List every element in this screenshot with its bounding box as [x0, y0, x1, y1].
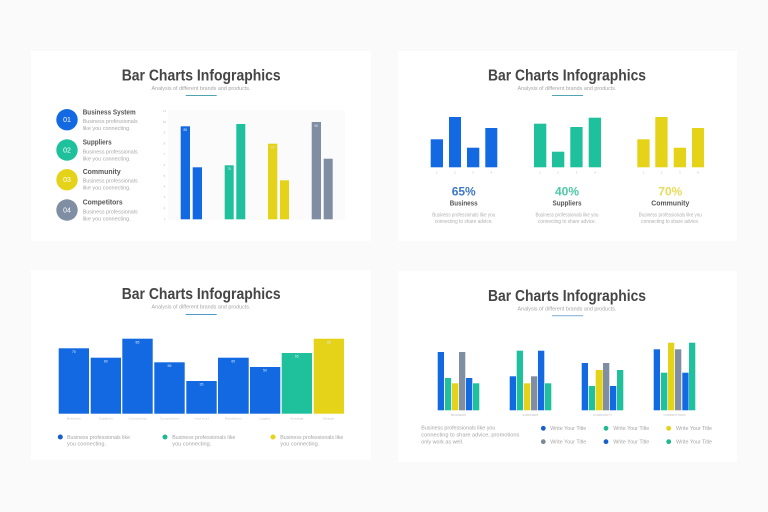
item: Community: Community — [83, 169, 121, 176]
legend: yellow — [270, 434, 343, 447]
bar chart: 85 — [136, 340, 139, 344]
legend grid: Write Your Title — [676, 440, 712, 446]
item: Competitors: Business professionals — [83, 209, 138, 215]
chart: Community: 2 — [661, 170, 663, 174]
legend grid — [541, 426, 712, 446]
legend grid: Write Your Title — [613, 426, 649, 432]
bar chart: Internal — [194, 416, 209, 420]
subtitle: Analysis of different brands and products. — [518, 306, 617, 312]
bar chart: 60 — [231, 359, 235, 363]
bar chart: Competitors — [160, 416, 180, 420]
stat: Suppliers — [536, 184, 599, 225]
item: Competitors: 04 — [63, 208, 71, 214]
bar group: Suppliers: SUPPLIERS — [522, 413, 538, 417]
chart: Community: 1 — [643, 170, 645, 174]
title underline — [186, 94, 217, 97]
item: Suppliers — [56, 139, 138, 162]
item: Competitors: like you connecting. — [83, 216, 131, 222]
panel: wide nine-column bar chart — [31, 270, 371, 460]
stat: Business — [432, 184, 495, 225]
title: Bar Charts Infographics — [122, 68, 281, 85]
bar chart: Logistic — [260, 416, 271, 420]
chart: Business: 3 — [472, 170, 474, 174]
chart: Business: 1 — [436, 170, 438, 174]
stat: Suppliers: Suppliers — [552, 201, 582, 208]
stat: Business: connecting to share advice. — [435, 219, 493, 225]
chart: Business: 2 — [454, 170, 456, 174]
legend grid: Write Your Title — [550, 426, 586, 432]
stat: Community: Community — [651, 201, 689, 208]
grouped bar chart: 85 — [183, 128, 187, 132]
bar chart: 85 — [327, 340, 331, 344]
grouped bar chart: 5 — [164, 174, 166, 178]
bar chart: 55 — [168, 364, 171, 368]
bar chart: 50 — [263, 369, 267, 373]
title: Bar Charts Infographics — [488, 288, 646, 305]
grouped bar chart: 10 — [163, 120, 166, 124]
grouped bar chart: 3 — [164, 195, 166, 199]
title: Bar Charts Infographics — [122, 286, 281, 303]
legend: yellow: you connecting. — [280, 441, 320, 447]
bar chart: 35 — [200, 383, 203, 387]
legend grid: Write Your Title — [613, 440, 649, 446]
bar chart: Community — [128, 416, 147, 420]
legend: green: you connecting. — [172, 441, 212, 447]
item: Business System: Business System — [83, 109, 136, 116]
grouped bar chart: 9 — [164, 130, 166, 134]
bar chart: 60 — [104, 359, 108, 363]
subtitle: Analysis of different brands and products. — [152, 304, 251, 310]
grouped bar chart: 1 — [164, 217, 166, 221]
legend: green — [162, 434, 235, 447]
bar group: Business: BUSINESS — [451, 413, 466, 417]
panel: four multi-bar groups — [398, 271, 737, 462]
item: Suppliers: 02 — [63, 148, 71, 154]
legend: blue — [58, 434, 130, 447]
stat: Community — [639, 184, 702, 225]
bar group: Competitors: COMPETITORS — [664, 413, 686, 417]
title: Bar Charts Infographics — [488, 68, 646, 85]
stat: Business: Business professionals like you — [432, 212, 495, 218]
stat: Suppliers: 40% — [555, 184, 579, 198]
grouped bar chart: 4 — [164, 184, 166, 188]
title underline — [552, 94, 583, 97]
bar chart: Design — [323, 416, 335, 420]
chart: Business — [431, 117, 497, 174]
item: Business System: like you connecting. — [83, 126, 131, 132]
grouped bar chart: 90 — [314, 124, 318, 128]
stat: Suppliers: connecting to share advice. — [538, 219, 596, 225]
grouped bar chart: 2 — [164, 206, 166, 210]
chart: Suppliers — [534, 118, 601, 174]
grouped bar chart: 75 — [227, 167, 231, 171]
stat: Suppliers: Business professionals like you — [536, 212, 599, 218]
grouped bar chart — [163, 109, 345, 221]
grouped bar chart: 70 — [271, 146, 275, 150]
chart: Community: 4 — [697, 170, 699, 174]
legend grid: Write Your Title — [676, 426, 712, 432]
bar chart: 65 — [295, 355, 299, 359]
bar group: Suppliers — [510, 351, 551, 417]
item: Competitors: Competitors — [83, 200, 123, 207]
bar group: Community: COMMUNITY — [593, 413, 612, 417]
item: Suppliers: like you connecting. — [83, 156, 131, 162]
chart: Business: 4 — [490, 170, 492, 174]
stat: Business: 65% — [452, 184, 476, 198]
item: Suppliers: Business professionals — [83, 149, 138, 155]
chart: Suppliers: 3 — [576, 170, 578, 174]
chart: Community — [637, 117, 704, 174]
legend: yellow: Business professionals like — [280, 435, 343, 441]
description text: only work as well. — [421, 440, 464, 446]
bar group: Community — [582, 363, 623, 417]
item: Community — [56, 169, 138, 192]
item: Community: 03 — [63, 177, 71, 184]
panel: legend list and grouped bars — [31, 51, 371, 241]
item: Business System: 01 — [63, 117, 71, 124]
grouped bar chart: 8 — [164, 142, 166, 146]
grouped bar chart: 11 — [163, 109, 166, 113]
chart: Suppliers: 4 — [594, 170, 596, 174]
bar chart: 75 — [72, 350, 76, 354]
title underline — [552, 314, 583, 317]
item: Community: Business professionals — [83, 179, 138, 185]
subtitle: Analysis of different brands and products. — [152, 86, 251, 92]
description text: Business professionals like you — [421, 426, 495, 432]
bar chart: Strategy — [290, 416, 304, 420]
panel: three small bar charts — [398, 51, 737, 241]
grouped bar chart: 6 — [164, 163, 166, 167]
item: Community: like you connecting. — [83, 186, 131, 192]
item: Suppliers: Suppliers — [83, 140, 112, 147]
grouped bar chart: 7 — [164, 152, 166, 156]
item: Competitors — [56, 199, 138, 222]
stat: Community: Business professionals like you — [639, 212, 702, 218]
legend: blue: you connecting. — [67, 441, 106, 447]
item: Business System — [56, 109, 138, 132]
title underline — [186, 313, 217, 316]
stat: Community: connecting to share advice. — [641, 219, 699, 225]
legend grid: Write Your Title — [550, 440, 586, 446]
description text: connecting to share advice, promotions — [421, 433, 520, 439]
bar chart: Suppliers — [99, 416, 113, 420]
chart: Community: 3 — [679, 170, 681, 174]
bar chart: Business — [67, 416, 81, 420]
chart: Suppliers: 1 — [539, 170, 541, 174]
stat: Business: Business — [450, 201, 478, 208]
bar group: Business — [438, 352, 479, 417]
legend: green: Business professionals like — [172, 435, 235, 441]
legend: blue: Business professionals like — [67, 435, 130, 441]
bar group: Competitors — [654, 343, 695, 417]
item: Business System: Business professionals — [83, 119, 138, 125]
chart: Suppliers: 2 — [557, 170, 559, 174]
stat: Community: 70% — [658, 184, 683, 198]
bar chart: Distribution — [225, 416, 242, 420]
description text — [421, 426, 520, 446]
subtitle: Analysis of different brands and products. — [518, 86, 617, 92]
bar chart — [59, 339, 344, 420]
